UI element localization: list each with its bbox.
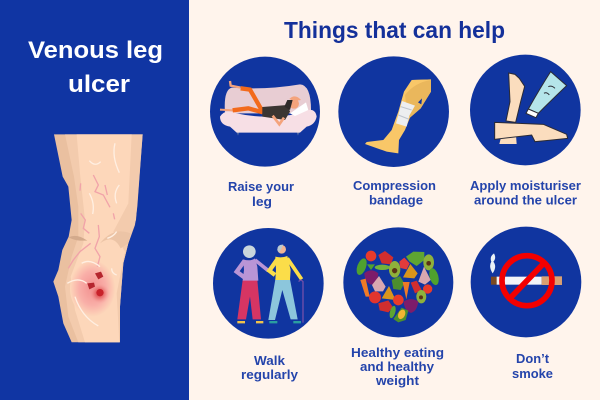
icon: compression bandage bbox=[338, 56, 449, 167]
label: apply moisturiser around the ulcer: around the ulcer bbox=[474, 194, 577, 208]
label: healthy eating and healthy weight: Healthy eating bbox=[351, 346, 444, 360]
label: healthy eating and healthy weight: and healthy bbox=[360, 360, 434, 374]
icon: healthy eating heart of vegetables bbox=[343, 227, 453, 337]
illustration: leg with venous ulcer bbox=[53, 134, 143, 342]
label: healthy eating and healthy weight bbox=[351, 346, 444, 388]
label: walk regularly bbox=[241, 354, 298, 382]
heading: Venous leg ulcer: Venous leg bbox=[28, 37, 163, 64]
label: don't smoke bbox=[512, 352, 553, 381]
label: walk regularly: Walk bbox=[254, 354, 285, 368]
icon: no smoking bbox=[471, 227, 581, 337]
panel: left blue sidebar bbox=[0, 0, 189, 400]
label: raise your leg: Raise your bbox=[228, 180, 294, 194]
label: apply moisturiser around the ulcer bbox=[470, 179, 581, 208]
heading: Venous leg ulcer bbox=[28, 37, 163, 98]
icon: raise your leg bbox=[210, 57, 320, 167]
label: don't smoke: smoke bbox=[512, 367, 553, 381]
label: apply moisturiser around the ulcer: Apply moisturiser bbox=[470, 179, 581, 193]
label: compression bandage bbox=[353, 179, 436, 208]
label: raise your leg: leg bbox=[252, 195, 272, 209]
icon: apply moisturiser bbox=[470, 55, 581, 165]
label: don't smoke: Don’t bbox=[516, 352, 550, 366]
label: compression bandage: bandage bbox=[369, 194, 423, 208]
label: healthy eating and healthy weight: weight bbox=[375, 374, 420, 388]
heading: Things that can help: Things that can help bbox=[284, 17, 505, 43]
heading: Venous leg ulcer: ulcer bbox=[68, 71, 130, 98]
label: raise your leg bbox=[228, 180, 294, 209]
icon: walk regularly bbox=[213, 228, 324, 339]
label: walk regularly: regularly bbox=[241, 368, 298, 382]
label: compression bandage: Compression bbox=[353, 179, 436, 193]
